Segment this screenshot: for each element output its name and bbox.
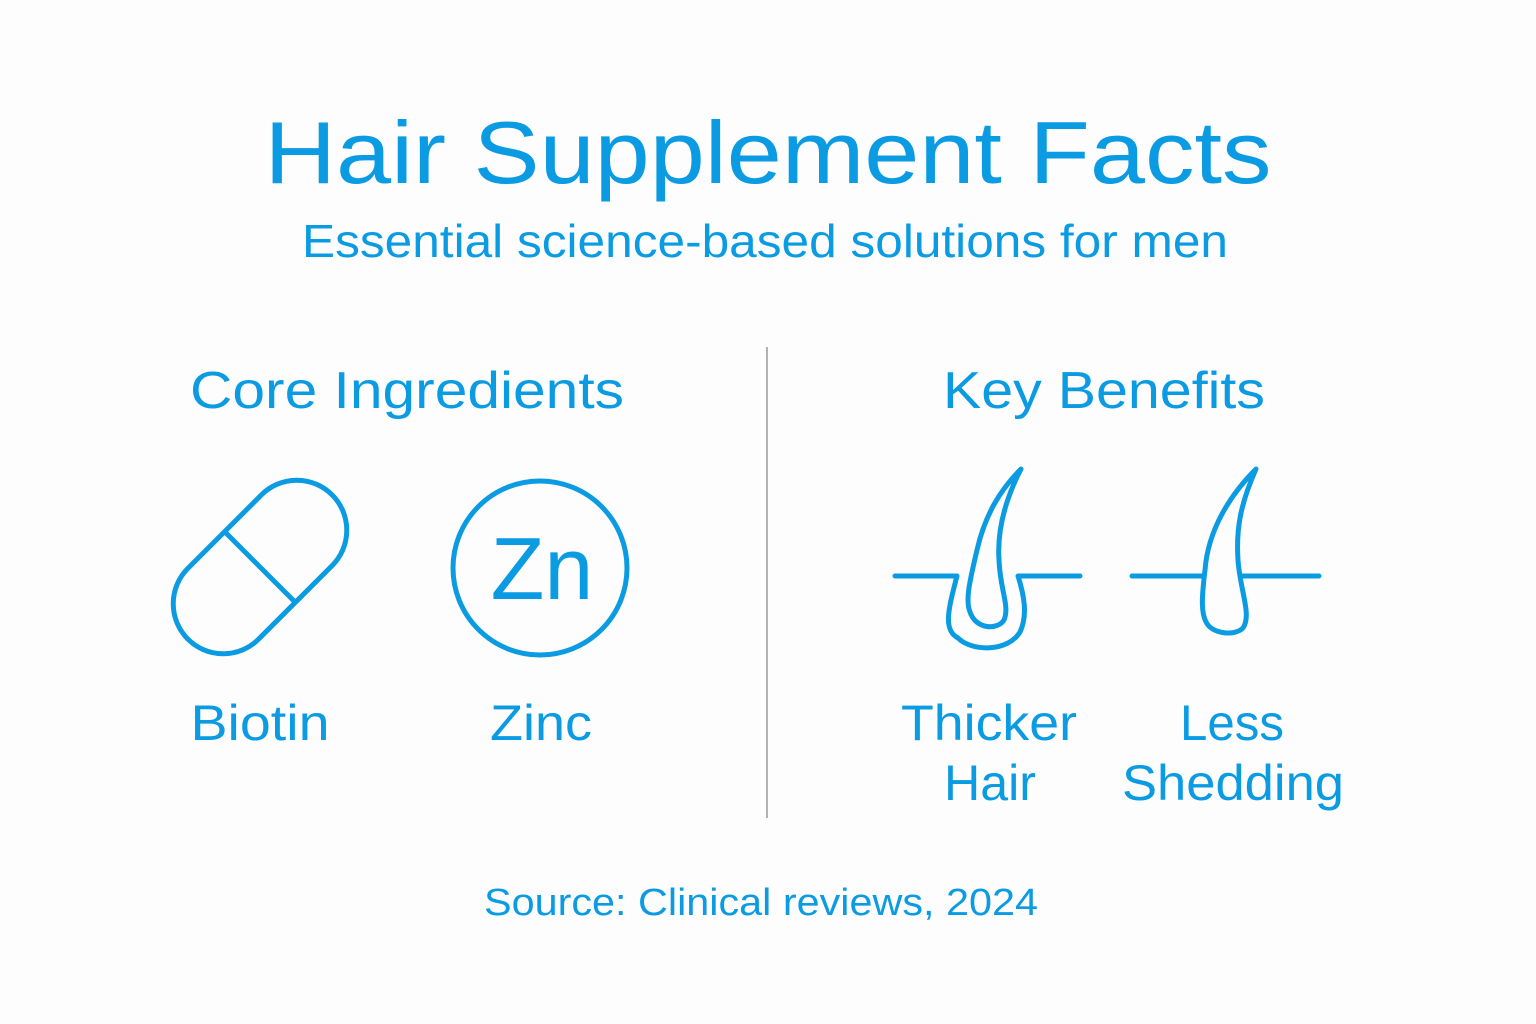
title: Hair Supplement Facts	[264, 103, 1272, 202]
icon: biotin capsule	[153, 460, 367, 674]
label: biotin: Biotin	[190, 695, 330, 751]
label: zinc: Zinc	[490, 695, 592, 751]
label: thicker hair	[901, 695, 1077, 811]
label: less shedding	[1122, 695, 1344, 811]
heading: core ingredients: Core Ingredients	[190, 362, 624, 420]
label: less shedding: Less	[1180, 695, 1284, 751]
label: thicker hair: Thicker	[901, 695, 1077, 751]
heading: key benefits: Key Benefits	[943, 362, 1265, 420]
subtitle: Essential science-based solutions for men	[302, 215, 1228, 267]
icon: thicker hair follicle	[895, 469, 1080, 648]
icon: zinc	[453, 481, 627, 655]
source footnote: Source: Clinical reviews, 2024	[484, 882, 1038, 924]
panel: key benefits	[895, 362, 1344, 811]
panel: core ingredients	[153, 362, 627, 751]
icon: less shedding hair	[1132, 469, 1319, 633]
label: less shedding: Shedding	[1122, 755, 1344, 811]
icon: zinc: Zn	[491, 519, 593, 618]
label: thicker hair: Hair	[944, 755, 1036, 811]
